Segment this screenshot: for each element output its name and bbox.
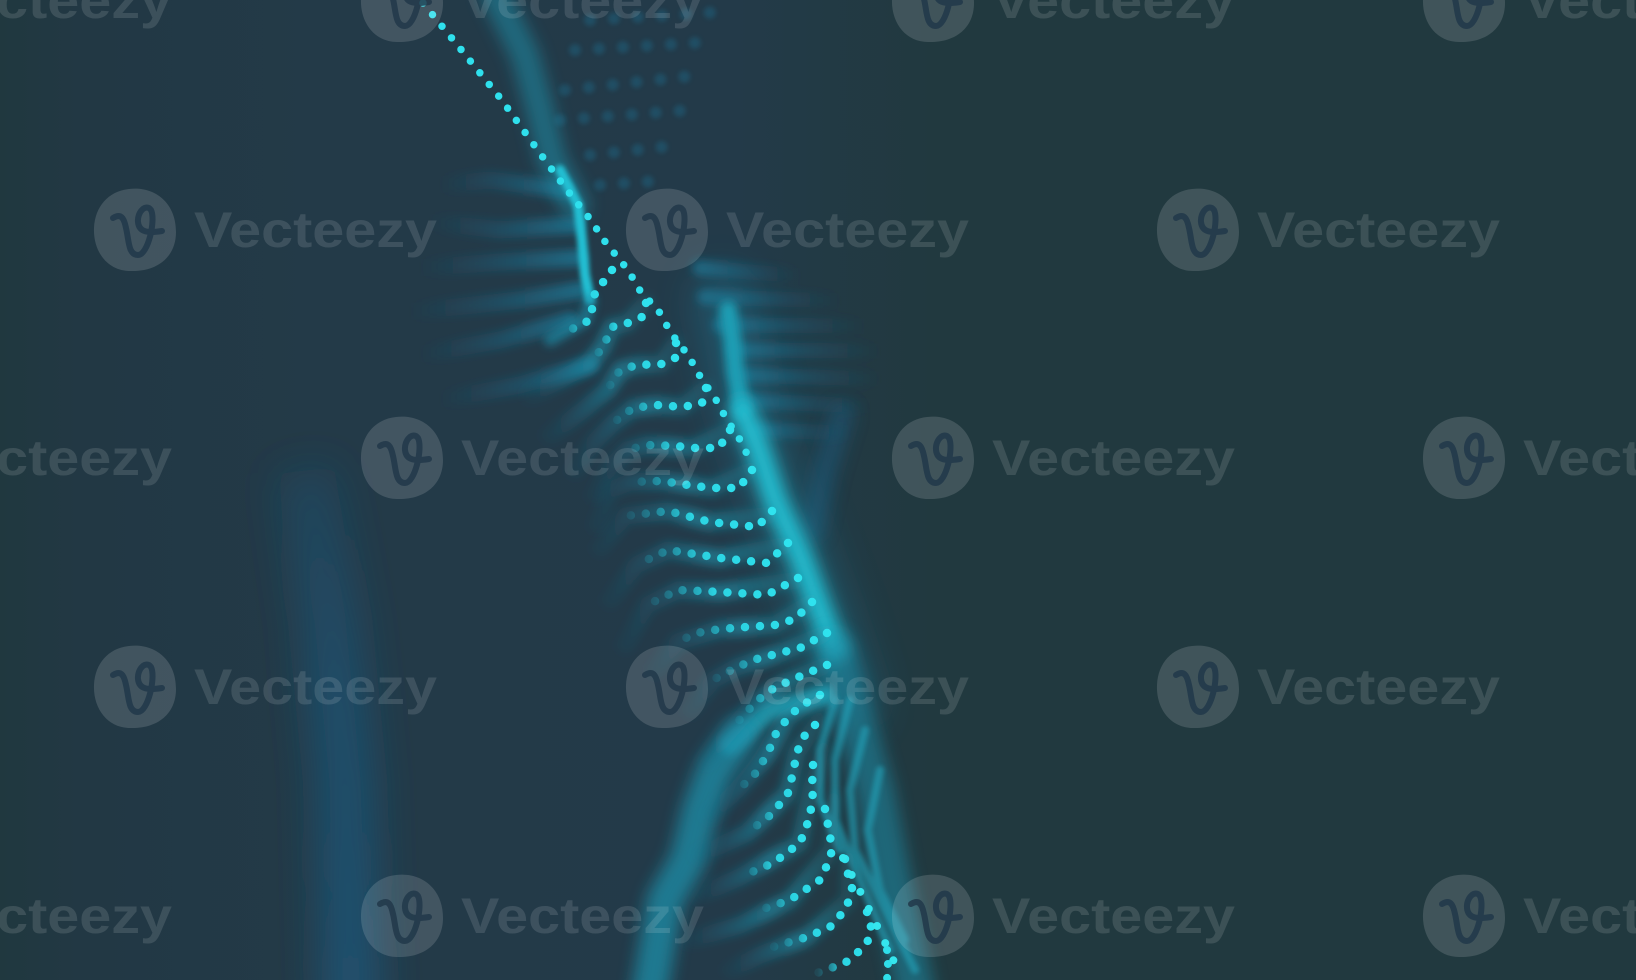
watermark row 2: [94, 189, 1500, 271]
watermark row 2: Vecteezy: [194, 202, 437, 258]
faint right rungs: [700, 268, 880, 433]
watermark row 5: [0, 875, 1636, 957]
main ribbon: [722, 300, 915, 980]
watermark row 3: [0, 417, 1636, 499]
dotted rungs: [560, 270, 897, 980]
faint right column: [812, 415, 842, 530]
watermark row 4: Vecteezy: [726, 659, 969, 715]
watermark row 1: [0, 0, 1636, 42]
watermark row 4: [94, 646, 1500, 728]
watermark row 5: Vecteezy: [461, 888, 704, 944]
watermark row 4: Vecteezy: [194, 659, 437, 715]
watermark row 2: Vecteezy: [726, 202, 969, 258]
top ribbon: [495, 0, 590, 340]
lower left band: [650, 695, 825, 980]
blurred left column: [305, 470, 352, 980]
faint top dots: [560, 12, 720, 185]
watermark row 5: Vecteezy: [992, 888, 1235, 944]
blurred rung tails: [530, 303, 850, 970]
faint left rungs: [410, 180, 590, 400]
main diagonal dotted line: [423, 3, 750, 460]
watermark row 3: Vecteezy: [461, 430, 704, 486]
lower strands right of the rungs: [820, 700, 915, 970]
watermark row 3: Vecteezy: [992, 430, 1235, 486]
watermark row 4: Vecteezy: [1257, 659, 1500, 715]
watermark row 2: Vecteezy: [1257, 202, 1500, 258]
